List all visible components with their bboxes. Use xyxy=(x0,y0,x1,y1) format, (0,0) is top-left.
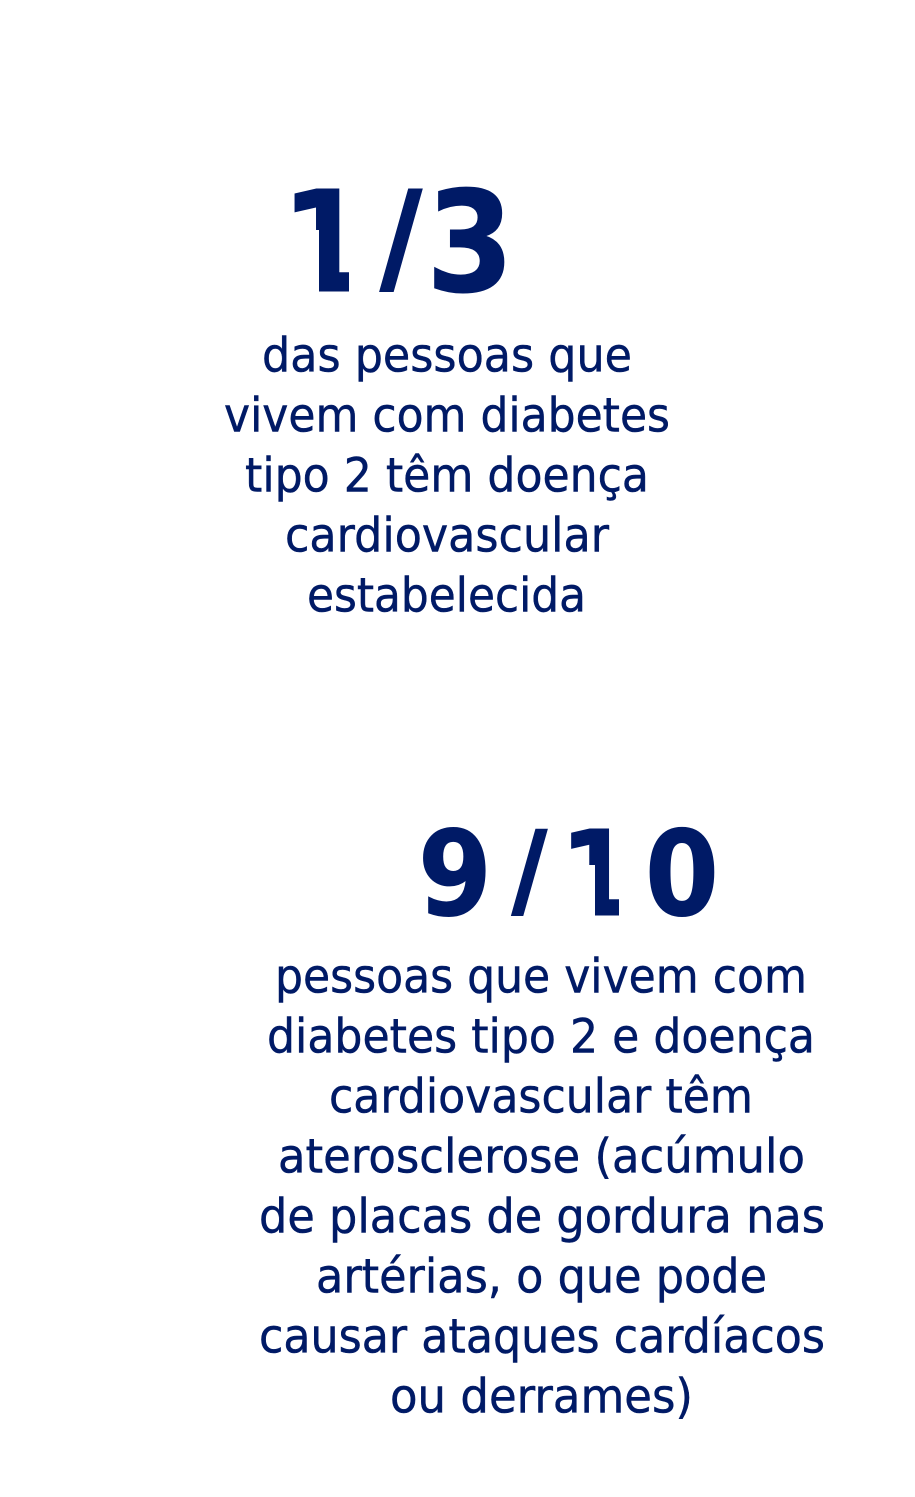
big number: 1/3: 1/3 xyxy=(281,162,514,325)
description: 9/10: artérias, o que pode xyxy=(316,1250,767,1304)
description: 9/10: aterosclerose (acúmulo xyxy=(278,1130,805,1184)
description: 9/10: cardiovascular têm xyxy=(329,1070,753,1124)
description: 1/3: das pessoas que xyxy=(262,328,632,384)
description: 9/10 xyxy=(259,950,825,1424)
description: 9/10: causar ataques cardíacos xyxy=(259,1310,825,1364)
description: 1/3: vivem com diabetes xyxy=(224,388,670,444)
description: 1/3 xyxy=(224,328,670,624)
statistic block: 1/3 xyxy=(224,162,670,624)
description: 1/3: tipo 2 têm doença xyxy=(245,448,649,504)
description: 1/3: estabelecida xyxy=(307,568,586,624)
description: 1/3: cardiovascular xyxy=(285,508,610,564)
big number: 9/10: 9/10 xyxy=(418,807,719,943)
statistic block: 9/10 xyxy=(259,807,825,1424)
description: 9/10: de placas de gordura nas xyxy=(259,1190,825,1244)
description: 9/10: ou derrames) xyxy=(390,1370,693,1424)
description: 9/10: diabetes tipo 2 e doença xyxy=(267,1010,815,1064)
description: 9/10: pessoas que vivem com xyxy=(275,950,807,1004)
